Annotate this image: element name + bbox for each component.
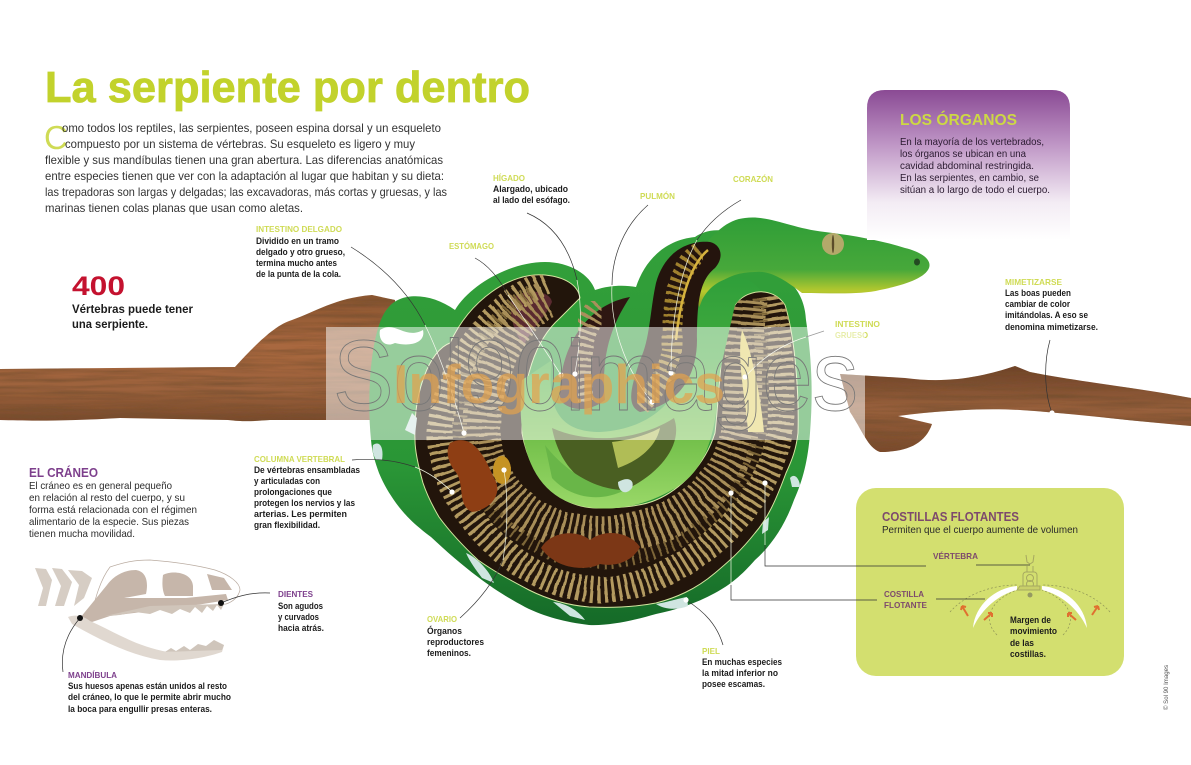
label: costilla flotante: COSTILLA: [884, 589, 924, 599]
text: los órganos: sitúan a lo largo de todo el cuerpo.: [900, 184, 1050, 196]
callout: piel: [702, 646, 782, 689]
diagram: right floating rib: [1042, 586, 1087, 628]
label: estómago: ESTÓMAGO: [449, 240, 494, 251]
callout: piel: En muchas especies: [702, 657, 782, 667]
leader lines inside snake: [415, 240, 806, 585]
watermark band: [326, 320, 865, 440]
callout: columna vertebral: arterias. Les permiten: [254, 509, 347, 519]
central chamber ribs: [579, 306, 600, 405]
diagram: spine dot: [1028, 592, 1032, 598]
callout: mandíbula: la boca para engullir presas enteras.: [68, 704, 212, 714]
label: intestino grueso: [835, 319, 880, 340]
callout: ovario: Órganos: [427, 625, 462, 636]
callout: mimetizarse: imitándolas. A eso se: [1005, 310, 1088, 320]
callout: columna vertebral: De vértebras ensambladas: [254, 465, 360, 475]
callout: dientes: hacia atrás.: [278, 623, 324, 633]
right branch: [840, 366, 1191, 452]
callout: ovario: reproductores: [427, 637, 484, 647]
callout: dientes: Son agudos: [278, 601, 323, 611]
intro text: entre especies tienen que ver con la adaptación al lugar que habitan y su dieta:: [45, 169, 444, 183]
callout: piel: la mitad inferior no: [702, 668, 778, 678]
text: el cráneo: El cráneo es en general pequeño: [29, 480, 172, 492]
label: intestino grueso: INTESTINO: [835, 319, 880, 329]
diagram: arrows: [961, 606, 1099, 620]
inner U band: [521, 278, 760, 509]
text: el cráneo: alimentario de la especie. Sus piezas: [29, 516, 189, 528]
centre yellow highlights: [612, 428, 660, 468]
text: el cráneo: forma está relacionada con el régimen: [29, 504, 197, 516]
organ: ovary and intestine: [448, 440, 497, 512]
callout: intestino delgado: de la punta de la cola.: [256, 269, 341, 279]
text: margen de movimiento: [1010, 615, 1057, 659]
callout: hígado: Alargado, ubicado: [493, 184, 568, 194]
callout: mimetizarse: MIMETIZARSE: [1005, 277, 1062, 287]
diagram: vertebra: [1017, 555, 1040, 590]
callout: mandíbula: MANDÍBULA: [68, 670, 117, 680]
title: La serpiente por dentro: [45, 63, 530, 112]
ribs: [440, 282, 782, 590]
label: corazón: CORAZÓN: [733, 173, 773, 184]
stat: 400 vertebrae: Vértebras puede tener: [72, 302, 193, 316]
text: margen de movimiento: de las: [1010, 638, 1034, 648]
callout: dientes: y curvados: [278, 612, 319, 622]
intro text: las trepadoras son largas y delgadas; las excavadoras, más cortas y gruesas, y las: [45, 185, 447, 199]
vertebrae: [35, 568, 92, 606]
callout: hígado: [493, 173, 570, 205]
organ: yellow egg: [493, 456, 511, 484]
callout: ovario: [427, 614, 484, 658]
callout: columna vertebral: COLUMNA VERTEBRAL: [254, 454, 345, 464]
large intestine: [740, 330, 764, 432]
callout: mandíbula: del cráneo, lo que le permite abrir mucho: [68, 692, 231, 702]
cranium: [92, 560, 240, 612]
label: pulmón: PULMÓN: [640, 190, 675, 201]
watermark: sol90images: Sol90images: [333, 320, 858, 432]
callout: dientes: DIENTES: [278, 589, 313, 599]
stat: 400 vertebrae: [72, 271, 193, 331]
label: intestino grueso: GRUESO: [835, 330, 868, 340]
snake nostril: [914, 258, 920, 266]
callout: columna vertebral: y articuladas con: [254, 476, 320, 486]
organ: liver: [511, 292, 552, 345]
coil cut-away interior: [415, 275, 798, 607]
drop cap: C: [44, 119, 68, 156]
organ: lower gut: [541, 533, 640, 568]
callout: hígado: al lado del esófago.: [493, 195, 570, 205]
callout: piel: PIEL: [702, 646, 720, 656]
callout: piel: posee escamas.: [702, 679, 765, 689]
snake illustration: [369, 218, 930, 625]
callout: intestino delgado: INTESTINO DELGADO: [256, 224, 342, 234]
subtitle: Permiten que el cuerpo aumente de volumen: [882, 525, 1078, 536]
intro text: flexible y sus mandíbulas tienen una gran abertura. Las diferencias anatómicas: [45, 153, 443, 167]
text: el cráneo: tienen mucha movilidad.: [29, 528, 135, 540]
snake eye: [822, 233, 844, 255]
callout: ovario: OVARIO: [427, 614, 457, 624]
neck interior: [631, 242, 721, 412]
callout: intestino delgado: termina mucho antes: [256, 258, 337, 268]
centre green band: [545, 445, 625, 497]
left branch: [0, 295, 400, 421]
text: el cráneo: en relación al resto del cuerpo, y su: [29, 492, 185, 504]
copyright: © Sol 90 Images: [1163, 665, 1170, 710]
heading: el cráneo: EL CRÁNEO: [29, 465, 98, 480]
callout: mandíbula: [68, 670, 231, 714]
heading: costillas flotantes: COSTILLAS FLOTANTES: [882, 509, 1019, 524]
skull illustration: [35, 560, 240, 661]
panel: costillas flotantes: [856, 488, 1124, 676]
callout: mandíbula: Sus huesos apenas están unidos al resto: [68, 681, 227, 691]
lower jaw: [68, 616, 224, 661]
callout: columna vertebral: protegen los nervios y las: [254, 498, 355, 508]
callout: intestino delgado: delgado y otro grueso,: [256, 247, 345, 257]
stat: 400 vertebrae: 400: [72, 271, 125, 301]
callout: mimetizarse: cambiar de color: [1005, 299, 1070, 309]
heading: los órganos: LOS ÓRGANOS: [900, 110, 1017, 129]
label: costilla flotante: [884, 589, 927, 610]
intro text: omo todos los reptiles, las serpientes, poseen espina dorsal y un esqueleto: [62, 121, 441, 135]
text: los órganos: los órganos se ubican en una: [900, 148, 1026, 160]
callout: mimetizarse: Las boas pueden: [1005, 288, 1071, 298]
intro text: compuesto por un sistema de vértebras. Su esqueleto es ligero y muy: [65, 137, 415, 151]
snake head: [690, 218, 930, 312]
snake outer body: [369, 230, 812, 625]
inner U shadowed centre: [552, 418, 676, 491]
diagram: movement range arcs: [950, 585, 1110, 635]
diagram: left floating rib: [973, 586, 1017, 628]
callout: columna vertebral: prolongaciones que: [254, 487, 332, 497]
intro text: [44, 119, 447, 215]
skin patches: [373, 327, 800, 620]
label: vértebra: VÉRTEBRA: [933, 551, 978, 561]
neck ribs: [640, 252, 700, 405]
central chamber: [560, 297, 630, 409]
callout: hígado: HÍGADO: [493, 173, 525, 183]
text: margen de movimiento: movimiento: [1010, 626, 1057, 636]
callout: columna vertebral: gran flexibilidad.: [254, 520, 320, 530]
callout: columna vertebral: [254, 454, 360, 530]
panel: los órganos: [867, 90, 1070, 240]
label: costilla flotante: FLOTANTE: [884, 600, 927, 610]
upper teeth: [105, 604, 224, 616]
text: los órganos: En las serpientes, en cambio, se: [900, 172, 1039, 184]
lower teeth: [165, 640, 224, 652]
callout: mimetizarse: [1005, 277, 1098, 332]
text: margen de movimiento: Margen de: [1010, 615, 1051, 625]
text: los órganos: En la mayoría de los vertebrados,: [900, 136, 1044, 148]
neck spine: [676, 250, 708, 340]
callout: ovario: femeninos.: [427, 648, 471, 658]
text: el cráneo: [29, 480, 197, 540]
callout dots: [77, 370, 1055, 621]
text: los órganos: [900, 136, 1050, 196]
skull bones: [80, 570, 232, 622]
watermark: infographics: Infographics: [393, 353, 725, 415]
text: los órganos: cavidad abdominal restringida.: [900, 160, 1034, 172]
intro text: marinas tienen colas planas que usan como aletas.: [45, 201, 303, 215]
callout: intestino delgado: Dividido en un tramo: [256, 236, 339, 246]
callout: intestino delgado: [256, 224, 345, 279]
stat: 400 vertebrae: una serpiente.: [72, 317, 148, 331]
callout: dientes: [278, 589, 324, 633]
leader lines: [62, 200, 1052, 672]
text: margen de movimiento: costillas.: [1010, 649, 1046, 659]
section: el cráneo: [29, 465, 197, 540]
callout: mimetizarse: denomina mimetizarse.: [1005, 322, 1098, 332]
